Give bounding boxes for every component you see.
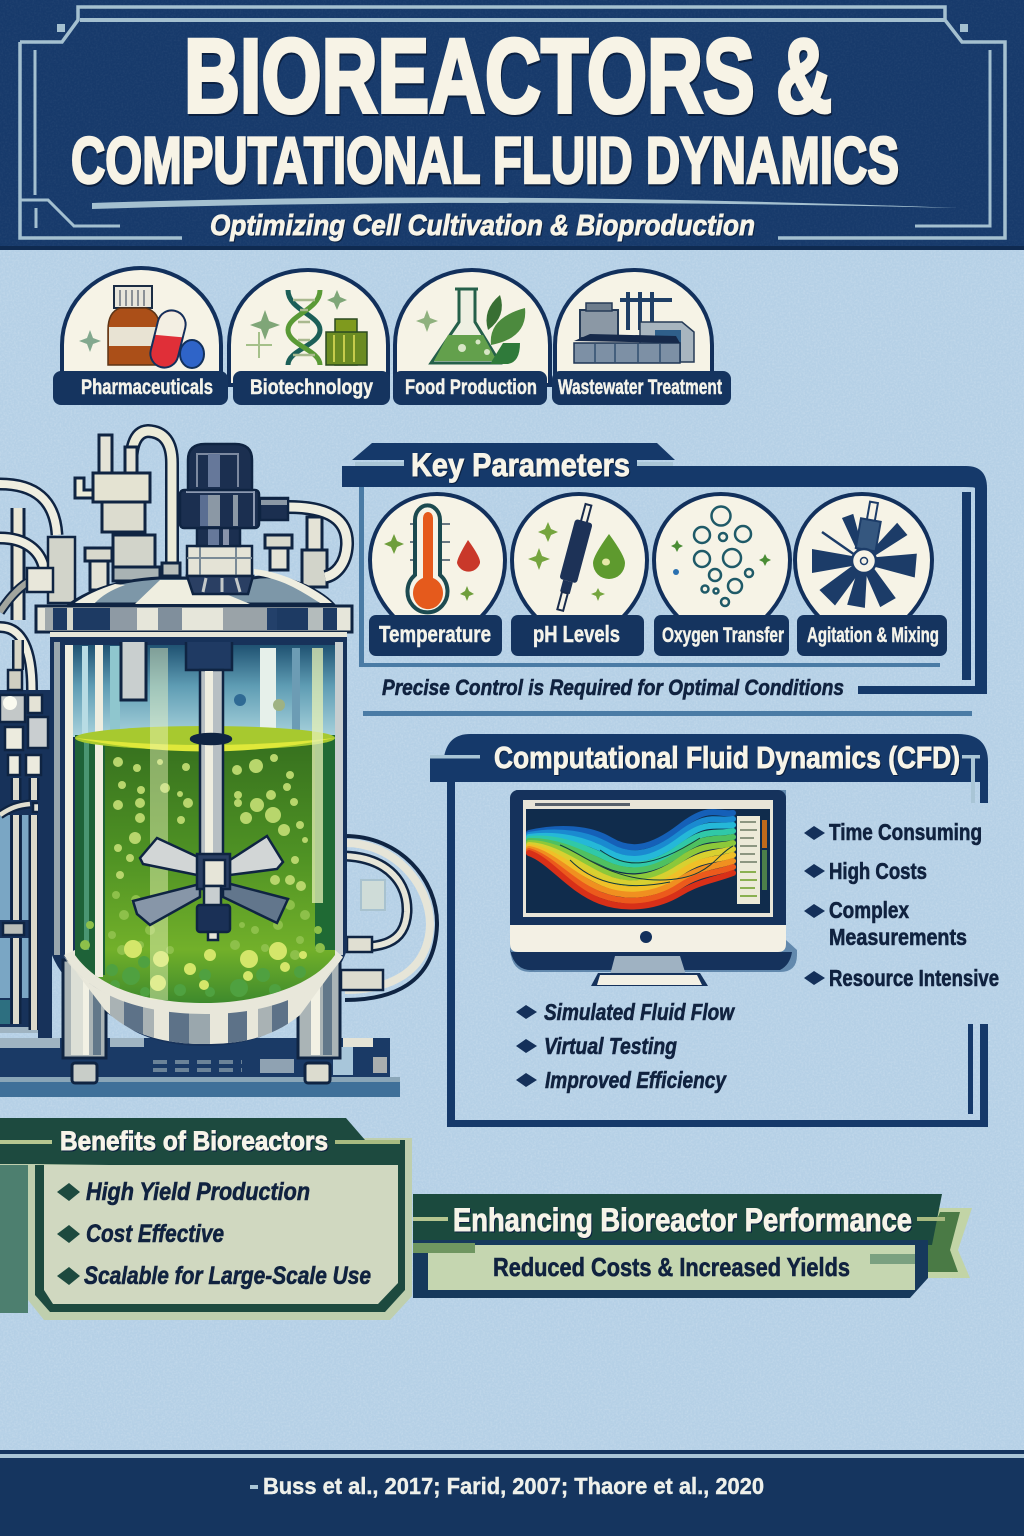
monitor with CFD simulation	[510, 790, 797, 986]
label: Biotechnology	[233, 371, 390, 405]
top-left fittings	[75, 431, 327, 590]
label: Agitation and Mixing: Agitation & Mixing	[807, 624, 939, 647]
icon: pharmaceuticals	[62, 268, 221, 385]
label: pH Levels	[511, 615, 644, 656]
icon: biotechnology DNA	[229, 270, 388, 385]
caption: precise control: Precise Control is Required for Optimal Conditions	[382, 675, 844, 700]
panel: key parameters	[342, 443, 987, 716]
list: CFD challenges: Measurements	[829, 924, 967, 950]
list: CFD challenges	[804, 819, 999, 991]
label: Oxygen Transfer	[654, 615, 789, 656]
references text: Buss et al., 2017; Farid, 2007; Thaore et al., 2020	[263, 1473, 764, 1499]
label: Biotechnology: Biotechnology	[250, 376, 373, 399]
list: benefits	[57, 1178, 371, 1290]
vessel body	[50, 635, 347, 1046]
label: Oxygen Transfer: Oxygen Transfer	[662, 624, 784, 647]
list: CFD challenges: High Costs	[829, 858, 927, 884]
icon: temperature	[370, 494, 505, 618]
heading: key parameters: Key Parameters	[411, 447, 630, 483]
label: Food Production: Food Production	[405, 376, 537, 399]
label: Food Production	[393, 371, 547, 405]
label: Pharmaceuticals: Pharmaceuticals	[81, 376, 213, 399]
label: Agitation and Mixing	[797, 615, 947, 656]
icon: food production flask	[395, 270, 550, 385]
heading: enhancing performance: Enhancing Bioreactor Performance	[453, 1202, 912, 1238]
panel: benefits of bioreactors	[0, 1118, 412, 1320]
list: benefits: Scalable for Large-Scale Use	[84, 1262, 371, 1290]
green culture liquid	[64, 726, 343, 1014]
impeller blades	[133, 836, 288, 940]
list: benefits: High Yield Production	[86, 1178, 310, 1206]
icon: wastewater treatment plant	[555, 270, 712, 385]
base plate	[0, 1038, 400, 1097]
application icon row	[53, 268, 731, 405]
panel: computational fluid dynamics	[430, 734, 999, 1127]
icon: pH levels	[512, 494, 647, 618]
impeller shaft	[186, 638, 232, 857]
label: Temperature: Temperature	[379, 621, 491, 647]
banner: enhancing bioreactor performance	[413, 1194, 972, 1298]
footer with references	[0, 1450, 1024, 1536]
heading: benefits: Benefits of Bioreactors	[60, 1126, 328, 1156]
vessel lid and flange	[36, 569, 352, 642]
list: CFD advantages	[516, 999, 736, 1093]
label: pH Levels: pH Levels	[533, 621, 620, 647]
culture bubbles	[80, 754, 325, 997]
header banner	[0, 0, 1024, 250]
bioreactor illustration	[0, 431, 437, 1097]
list: CFD advantages: Virtual Testing	[544, 1033, 677, 1059]
list: CFD challenges: Time Consuming	[829, 819, 982, 845]
caption: reduced costs: Reduced Costs & Increased Yields	[493, 1252, 850, 1282]
subtitle: Optimizing Cell Cultivation & Bioproduction	[210, 210, 755, 242]
label: Temperature	[369, 615, 502, 656]
label: Pharmaceuticals	[53, 371, 228, 405]
list: CFD advantages: Simulated Fluid Flow	[544, 999, 736, 1025]
icon: agitation and mixing	[795, 494, 932, 618]
streamlines	[529, 812, 733, 906]
icon: oxygen transfer	[654, 494, 790, 618]
list: benefits: Cost Effective	[86, 1220, 224, 1248]
list: CFD advantages: Improved Efficiency	[545, 1067, 727, 1093]
vessel legs	[63, 960, 340, 1083]
left piping	[0, 484, 75, 1033]
label: Wastewater Treatment	[552, 371, 731, 405]
right hoses	[345, 836, 437, 1000]
agitator motor	[180, 444, 288, 594]
label: Wastewater Treatment: Wastewater Treatment	[558, 376, 722, 399]
list: CFD challenges: Complex	[829, 897, 909, 923]
bowl bands	[63, 955, 342, 1044]
